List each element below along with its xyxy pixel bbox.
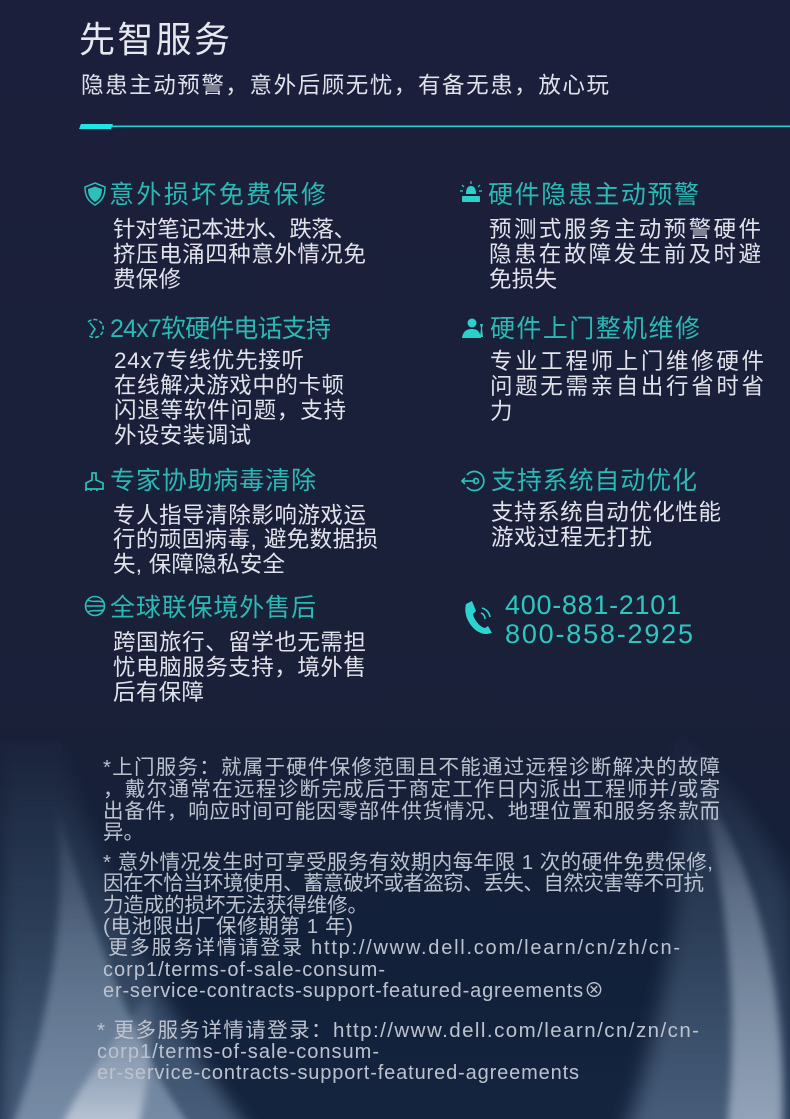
footnote: on-site service: ，戴尔通常在远程诊断完成后于商定工作日内派出工程师并/或寄 xyxy=(103,778,720,801)
footnote: on-site service: 异。 xyxy=(103,821,144,844)
body text: 问题无需亲自出行省时省 xyxy=(490,374,764,399)
body text: 专人指导清除影响游戏运 xyxy=(113,503,366,528)
body text: 专业工程师上门维修硬件 xyxy=(490,349,764,374)
heading: 意外损坏免费保修 xyxy=(109,181,326,209)
footnote: accidental coverage: 更多服务详情请登录 http://www.dell.com/learn/cn/zh/cn- xyxy=(108,936,680,959)
panel: accidental damage xyxy=(85,181,366,292)
heading: 硬件隐患主动预警 xyxy=(488,181,699,209)
panel: global warranty xyxy=(86,594,366,705)
body text xyxy=(113,217,366,292)
panel: virus removal xyxy=(86,467,378,577)
body text xyxy=(490,349,764,424)
icon: broom xyxy=(86,473,103,491)
body text: 费保修 xyxy=(113,267,181,292)
footnote: on-site service xyxy=(103,756,720,844)
body text xyxy=(114,348,346,448)
panel: phone support xyxy=(88,315,346,448)
curtain light: left xyxy=(0,740,240,1119)
body text: 支持系统自动优化性能 xyxy=(491,500,721,525)
panel: on-site repair xyxy=(462,315,764,424)
body text: 针对笔记本进水、跌落、 xyxy=(113,217,356,242)
body text: 隐患在故障发生前及时避 xyxy=(489,242,761,267)
body text: 失, 保障隐私安全 xyxy=(113,552,285,577)
subtitle: 隐患主动预警，意外后顾无忧，有备无患，放心玩 xyxy=(81,73,609,98)
footnote: accidental coverage: corp1/terms-of-sale-consum- xyxy=(103,959,385,981)
footnote: accidental coverage: * 意外情况发生时可享受服务有效期内每年限 1 次的硬件免费保修, xyxy=(103,851,713,874)
heading: 全球联保境外售后 xyxy=(110,594,316,622)
footnote: accidental coverage: (电池限出厂保修期第 1 年) xyxy=(103,915,353,938)
phone numbers xyxy=(505,590,693,649)
divider line with highlight xyxy=(79,124,790,129)
heading: 专家协助病毒清除 xyxy=(110,467,316,495)
footnote: accidental coverage: er-service-contracts-support-featured-agreements⊗ xyxy=(103,980,604,1002)
body text: 跨国旅行、留学也无需担 xyxy=(113,630,366,655)
footnote: more details: er-service-contracts-support-featured-agreements xyxy=(97,1062,579,1084)
icon: engineer xyxy=(462,318,483,338)
body text: 后有保障 xyxy=(113,680,204,705)
body text: 游戏过程无打扰 xyxy=(491,525,652,550)
panel: hardware warning xyxy=(460,181,761,292)
heading: 24x7软硬件电话支持 xyxy=(110,315,331,343)
heading: 支持系统自动优化 xyxy=(491,467,697,495)
body text xyxy=(113,503,378,577)
footnote: accidental coverage: 力造成的损坏无法获得维修。 xyxy=(103,894,368,917)
icon: 24h clock xyxy=(88,319,103,338)
body text: 在线解决游戏中的卡顿 xyxy=(114,373,344,398)
footnote: more details: * 更多服务详情请登录：http://www.dell.com/learn/cn/zn/cn- xyxy=(97,1019,699,1042)
body text: 24x7专线优先接听 xyxy=(114,348,304,373)
icon: alarm light xyxy=(460,181,482,202)
panel: hotline xyxy=(465,590,693,649)
footnote: more details xyxy=(97,1019,699,1084)
heading: 硬件上门整机维修 xyxy=(490,315,700,343)
body text: 挤压电涌四种意外情况免 xyxy=(113,242,366,267)
title: 先智服务 xyxy=(79,19,230,60)
icon: phone xyxy=(465,601,492,634)
footnote: on-site service: *上门服务：就属于硬件保修范围且不能通过远程诊断解决的故障 xyxy=(103,756,720,779)
body text: 忧电脑服务支持，境外售 xyxy=(113,655,366,680)
body text: 外设安装调试 xyxy=(114,423,251,448)
footnote: more details: corp1/terms-of-sale-consum- xyxy=(97,1041,379,1063)
body text: 预测式服务主动预警硬件 xyxy=(489,217,761,242)
body text: 闪退等软件问题，支持 xyxy=(114,398,346,423)
icon: auto cycle xyxy=(462,471,484,490)
icon: globe xyxy=(86,596,104,616)
body text: 行的顽固病毒, 避免数据损 xyxy=(113,527,378,552)
footnote: accidental coverage xyxy=(103,851,713,1002)
phone numbers: 800-858-2925 xyxy=(505,619,693,649)
body text xyxy=(489,217,761,292)
footnote: accidental coverage: 因在不恰当环境使用、蓄意破坏或者盗窃、丢失、自然灾害等不可抗 xyxy=(103,872,704,895)
body text: 免损失 xyxy=(489,267,557,292)
curtain light: right xyxy=(630,720,790,1119)
panel: system optimization xyxy=(462,467,721,550)
phone numbers: 400-881-2101 xyxy=(505,590,681,620)
body text xyxy=(113,630,366,705)
body text xyxy=(491,500,721,550)
icon: shield xyxy=(85,183,105,205)
footnote: on-site service: 出备件，响应时间可能因零部件供货情况、地理位置和服务条款而 xyxy=(103,800,720,823)
body text: 力 xyxy=(490,399,513,424)
